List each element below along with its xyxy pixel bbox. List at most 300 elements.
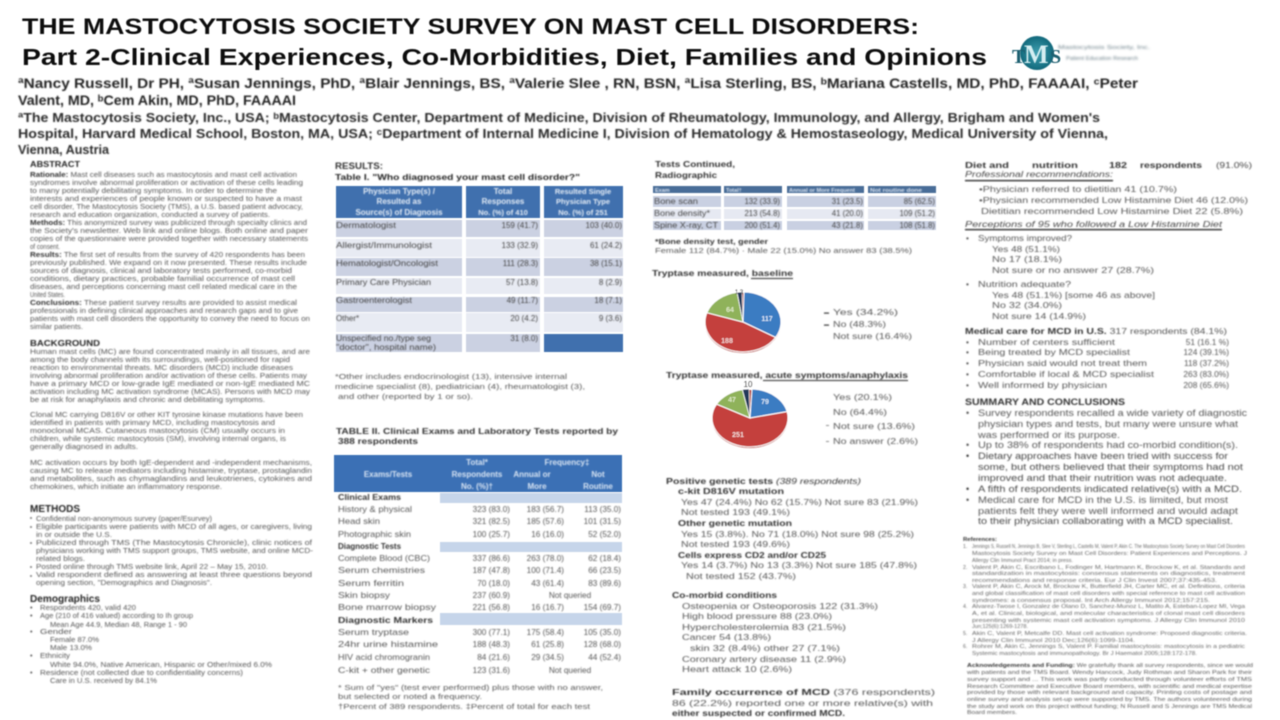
authors: Valent, MD, ᵇCem Akin, MD, PhD, FAAAAI xyxy=(18,93,296,108)
table II: Exams/Tests xyxy=(364,470,413,479)
table II: 321 (82.5) xyxy=(473,517,510,526)
text: family occurrence of MCD xyxy=(672,687,935,718)
list: genetic results: Not tested 193 (49.6%) xyxy=(681,539,790,549)
list: perceptions: Nutrition adequate? xyxy=(978,279,1071,289)
list: medical care: 124 (39.1%) xyxy=(1183,347,1229,357)
table II: Total* xyxy=(466,458,489,467)
list: methods bullets: Confidential non-anonymous survey (paper/Esurvey) xyxy=(36,514,212,523)
text: results: conditions, dietary practices, probable familial occurrence of mast cell xyxy=(30,274,295,283)
table I: Physician Type xyxy=(556,197,610,206)
legend: tryptase baseline: No (48.3%) xyxy=(833,320,886,329)
table: radiographic: Bone scan xyxy=(654,197,698,206)
list: conclusions: Dietary approaches have been tried with success for xyxy=(978,451,1228,461)
list: perceptions: No 17 (18.1%) xyxy=(992,254,1062,264)
panel: positive genetic tests xyxy=(666,476,918,581)
list: conclusions: physician types and tests, but many were unsure what xyxy=(978,419,1239,429)
list: co-morbid conditions xyxy=(682,601,878,674)
table I: 20 (4.2) xyxy=(510,314,538,323)
panel: table II clinical exams and tests xyxy=(334,426,622,711)
subheading: professional recommendations: Professional recommendations: xyxy=(965,169,1113,179)
icon: TMS society logo: T xyxy=(1012,46,1026,68)
pie chart: tryptase acute symptoms: 47 xyxy=(728,397,736,404)
text: background paragraph 3 xyxy=(30,458,312,491)
table: radiographic xyxy=(653,186,936,230)
table II: 16 (16.7) xyxy=(531,603,564,612)
affiliations: Hospital, Harvard Medical School, Boston, MA, USA; ᶜDepartment of Internal Medicine I, Division of Hematology & Hemostaseology, Medical University of Vienna, xyxy=(18,127,1108,141)
table II: Serum tryptase xyxy=(338,628,410,637)
authors xyxy=(18,76,1139,108)
table II: 263 (78.0) xyxy=(527,554,564,563)
text: acknowledgements and funding: Research Committee and Executive Board members, with scientific and medical expertise xyxy=(967,684,1252,690)
list: references: presenting with systemic mast cell activation symptoms. J Allergy Clin Immunol 2010 xyxy=(972,618,1245,624)
list: medical care: • xyxy=(966,358,969,368)
text: acknowledgements and funding xyxy=(966,663,1253,716)
table: radiographic: Exam xyxy=(655,188,670,194)
heading: references: References: xyxy=(963,537,997,543)
list: conclusions: • xyxy=(966,440,969,450)
table I: 9 (3.6) xyxy=(599,314,622,323)
list: genetic results: Cells express CD2 and/or CD25 xyxy=(678,550,826,560)
list: methods bullets: Posted online through TMS website link, April 22 – May 15, 2010. xyxy=(36,562,268,571)
table II: Diagnostic Tests xyxy=(338,542,401,551)
text: conclusions xyxy=(30,298,310,331)
text: background paragraph 1: have a primary MCD or low-grade IgE mediated or non-IgE mediated MC xyxy=(30,379,310,388)
heading: co-morbid conditions: Co-morbid conditions xyxy=(672,590,777,600)
text: acknowledgements and funding: online survey and analysis set-up were supported by TMS. The authors volunteered during xyxy=(967,697,1252,703)
list: references: 1. xyxy=(963,544,967,550)
list: references: and global classification of mast cell disorders with special reference to mast cell activation xyxy=(972,591,1245,597)
heading: methods: METHODS xyxy=(30,504,80,515)
text: results xyxy=(30,250,307,299)
list: co-morbid conditions: Hypercholesterolemia 83 (21.5%) xyxy=(682,622,846,632)
table I: 57 (13.8) xyxy=(506,278,538,287)
list: references: Valent P, Akin C, Escribano L, Fodinger M, Hartmann K, Brockow K, et al. Standards and xyxy=(972,565,1245,571)
table II: 100 (71.4) xyxy=(527,566,564,575)
table: radiographic: 43 (21.8) xyxy=(832,221,863,230)
table II xyxy=(334,455,622,675)
text: table II footnotes: †Percent of 389 respondents. ‡Percent of total for each test xyxy=(338,704,590,711)
icon: TMS society logo: Patient Education Research xyxy=(1066,56,1138,62)
list: references: standardization in mastocytosis: consensus statements on diagnostics, treatment xyxy=(972,571,1246,577)
table II: 24hr urine histamine xyxy=(338,640,439,649)
table II: Serum ferritin xyxy=(338,579,405,588)
text: conclusions: patients with mast cell disorders the opportunity to convey the need to focus on xyxy=(30,314,310,323)
table II: Not queried xyxy=(549,666,592,675)
pie chart: tryptase acute symptoms: 10 xyxy=(744,380,753,389)
list: references: Allergy Clin Immunol Pract 2014; in press. xyxy=(972,558,1073,564)
table II: Photographic skin xyxy=(338,530,411,539)
table I: 159 (41.7) xyxy=(502,221,538,230)
text: bone density footnote: Female 112 (84.7%) · Male 22 (15.0%) No answer 83 (38.5%) xyxy=(655,246,912,255)
table I: Source(s) of Diagnosis xyxy=(355,208,443,217)
authors: ªNancy Russell, Dr PH, ªSusan Jennings, PhD, ªBlair Jennings, BS, ªValerie Slee , RN, BSN, ªLisa Sterling, BS, ᵇMariana Castells, MD, PhD, FAAAAI, ᶜPeter xyxy=(18,76,1139,91)
text: background paragraph 1: Human mast cells (MC) are found concentrated mainly in all tissues, and are xyxy=(30,347,310,356)
pie chart: tryptase acute symptoms xyxy=(712,380,788,448)
table I: Hematologist/Oncologist xyxy=(336,259,439,268)
table: radiographic: 31 (23.5) xyxy=(832,197,863,206)
text: methods: copies of the questionnaire were provided together with necessary statements xyxy=(30,234,308,243)
list: genetic results: Other genetic mutation xyxy=(678,518,792,528)
list: methods bullets: in or outside the U.S. xyxy=(36,530,112,539)
legend: tryptase baseline: Yes (34.2%) xyxy=(833,308,898,317)
list: demographics: Residence (not collected due to confidentiality concerns) xyxy=(40,668,243,677)
text: conclusions: similar patients. xyxy=(30,322,83,331)
list: conclusions xyxy=(966,408,1248,526)
list: genetic results: Not tested 152 (43.7%) xyxy=(686,571,796,581)
table I: 31 (8.0) xyxy=(510,334,538,343)
list: conclusions: Up to 38% of respondents had co-morbid condition(s). xyxy=(978,440,1238,450)
icon: TMS society logo xyxy=(1012,36,1150,70)
panel: summary and conclusions xyxy=(965,397,1248,526)
list: demographics: Mean Age 44.9, Median 48, Range 1 - 90 xyxy=(50,620,187,629)
list: demographics: • xyxy=(30,668,33,677)
table II: 187 (47.8) xyxy=(473,566,510,575)
list: perceptions: Symptoms improved? xyxy=(978,233,1072,243)
text: background paragraph 3: MC activation occurs by both IgE-dependent and -independent mechanisms, xyxy=(30,458,312,467)
legend: tryptase baseline: Not sure (16.4%) xyxy=(833,332,912,341)
list: references: 2. xyxy=(963,565,967,571)
list: medical care: • xyxy=(966,369,969,379)
text: rationale: cell disorder, The Mastocytosis Society (TMS), a U.S. based patient advocacy, xyxy=(30,202,303,211)
table I: Total xyxy=(494,187,512,196)
table I: Gastroenterologist xyxy=(336,296,413,305)
pie chart: tryptase at baseline: 64 xyxy=(726,307,734,314)
panel: tryptase acute pie xyxy=(666,370,918,448)
heading: medical care: Medical care for MCD in U.S. 317 respondents (84.1%) xyxy=(965,326,1227,336)
text: background paragraph 1: involving abnormal proliferation and/or activation of these cells. Patients may xyxy=(30,371,307,380)
table: radiographic: 41 (20.0) xyxy=(832,209,863,218)
table II: 123 (31.6) xyxy=(473,666,510,675)
list: methods bullets: Eligible participants were patients with MCD of all ages, or caregivers, living xyxy=(36,522,312,531)
table II: 52 (52.0) xyxy=(588,530,621,539)
list: methods bullets: opening section, "Demographics and Diagnosis". xyxy=(36,578,212,587)
table II: No. (%)† xyxy=(461,482,493,491)
table I: Primary Care Physician xyxy=(336,278,431,287)
text: table I footnote xyxy=(335,372,585,401)
list: references: Akin C, Valent P, Metcalfe DD. Mast cell activation syndrome: Proposed diagnostic criteria. xyxy=(972,631,1247,637)
table: radiographic: 85 (62.5) xyxy=(904,197,935,206)
panel: methods xyxy=(30,504,314,587)
panel: co-morbid conditions xyxy=(672,590,878,674)
list: perceptions: Yes 48 (51.1%) xyxy=(992,244,1060,254)
list: conclusions: Medical care for MCD in the U.S. is limited, but most xyxy=(978,495,1229,505)
table I: "doctor", hospital name) xyxy=(336,343,436,352)
table II: Not xyxy=(591,470,605,479)
list: genetic results: Yes 15 (3.8%). No 71 (18.0%) Not sure 98 (25.2%) xyxy=(681,529,914,539)
list: perceptions xyxy=(966,233,1155,321)
heading: tests continued: Tests Continued, xyxy=(655,159,735,169)
list: references: J Allergy Clin Immunol 2010 Dec;126(6):1099-1104. xyxy=(972,638,1135,644)
list: demographics xyxy=(30,603,273,685)
list: co-morbid conditions: Heart attack 10 (2.6%) xyxy=(682,664,792,674)
pie chart: tryptase acute symptoms: 251 xyxy=(732,432,744,439)
text: conclusions: Conclusions: These patient survey results are provided to assist medical xyxy=(30,298,297,307)
table II: 175 (58.4) xyxy=(527,628,564,637)
table II: Complete Blood (CBC) xyxy=(338,554,430,563)
list: methods bullets: physicians working with TMS support groups, TMS website, and online MCD- xyxy=(36,546,314,555)
text: family occurrence of MCD: 86 (22.2%) reported one or more relative(s) with xyxy=(672,698,933,708)
table I: Allergist/Immunologist xyxy=(336,241,433,250)
text: results: United States. xyxy=(30,290,65,299)
table: radiographic: 132 (33.9) xyxy=(744,197,780,206)
text: methods: of consent. xyxy=(30,242,60,251)
text: bone density footnote: *Bone density test, gender xyxy=(655,237,768,246)
table II: HIV acid chromogranin xyxy=(338,653,430,662)
legend: tryptase acute: Not sure (13.6%) xyxy=(833,422,915,431)
table II: 100 (25.7) xyxy=(473,530,510,539)
text: family occurrence of MCD: Family occurrence of MCD (376 respondents) xyxy=(672,687,935,697)
list: demographics: Respondents 420, valid 420 xyxy=(40,603,136,612)
text: rationale: Rationale: Mast cell diseases such as mastocytosis and mast cell activation xyxy=(30,170,297,179)
affiliations: Vienna, Austria xyxy=(18,143,110,157)
list: medical care: Number of centers sufficient xyxy=(978,337,1116,347)
panel: tryptase baseline pie xyxy=(652,268,912,353)
list: conclusions: • xyxy=(966,451,969,461)
text: methods xyxy=(30,218,309,251)
list: genetic results: Yes 47 (24.4%) No 62 (15.7%) Not sure 83 (21.9%) xyxy=(681,497,918,507)
list: genetic results: Not tested 193 (49.1%) xyxy=(681,507,790,517)
subheading: perceptions: Perceptions of 95 who followed a Low Histamine Diet xyxy=(965,219,1223,229)
heading: tests continued: Radiographic xyxy=(655,170,717,180)
list: medical care: • xyxy=(966,337,969,347)
heading: demographics: Demographics xyxy=(30,594,100,605)
heading: diet and nutrition: nutrition xyxy=(1032,160,1078,170)
list: medical care: Being treated by MCD specialist xyxy=(978,347,1131,357)
list: co-morbid conditions: High blood pressure 88 (23.0%) xyxy=(682,611,832,621)
pie chart: tryptase at baseline xyxy=(705,290,781,353)
list: references: Rohrer M, Akin C, Jennings S, Valent P. Familial mastocytosis: mastocytosis in a pediatric xyxy=(972,644,1246,650)
table II: 29 (34.5) xyxy=(531,653,564,662)
table II: Skin biopsy xyxy=(338,591,391,600)
heading: table I title: Table I. "Who diagnosed your mast cell disorder?" xyxy=(335,172,580,182)
heading: abstract: ABSTRACT xyxy=(30,160,80,169)
table II: Serum chemistries xyxy=(338,566,425,575)
affiliations: ªThe Mastocytosis Society, Inc., USA; ᵇMastocytosis Center, Department of Medicine, Division of Rheumatology, Immunology, and Allergy, Brigham and Women's xyxy=(18,111,1100,125)
text: rationale: interests and experiences of people known or suspected to have a mast xyxy=(30,194,302,203)
text: rationale: to many potentially debilitating symptoms. In order to determine the xyxy=(30,186,277,195)
text: table II footnotes xyxy=(338,685,603,711)
table: radiographic: 200 (51.4) xyxy=(744,221,780,230)
list: demographics: White 94.0%, Native American, Hispanic or Other/mixed 6.0% xyxy=(50,660,273,669)
text: background paragraph 2 xyxy=(30,410,303,451)
text: background paragraph 3: chemokines, which initiate an inflammatory response. xyxy=(30,482,222,491)
legend: tryptase acute xyxy=(826,393,918,446)
text: table II footnotes: but selected or noted a frequency. xyxy=(338,694,482,701)
list: medical care: 51 (16.1 %) xyxy=(1186,337,1229,347)
table II: Diagnostic Markers xyxy=(338,616,434,625)
list: demographics: • xyxy=(30,651,33,660)
list: references: 5. xyxy=(963,631,967,637)
text: rationale xyxy=(30,170,303,219)
list: recommendations: •Physician recommended Low Histamine Diet 46 (12.0%) xyxy=(979,195,1248,205)
list: references: 4. xyxy=(963,604,967,610)
list: medical care: 263 (83.0%) xyxy=(1183,369,1229,379)
heading: diet and nutrition: 182 xyxy=(1109,160,1127,170)
table II: 62 (18.4) xyxy=(588,554,621,563)
text: methods: Methods: This anonymized survey was publicized through specialty clinics and xyxy=(30,218,307,227)
table II: Respondents xyxy=(452,470,503,479)
table II: More xyxy=(527,482,547,491)
list: methods bullets: related blogs. xyxy=(36,554,85,563)
text: background paragraph 1: activation including MC activation syndrome (MCAS). Persons with MCD may xyxy=(30,387,310,396)
title: THE MASTOCYTOSIS SOCIETY SURVEY ON MAST CELL DISORDERS: xyxy=(22,14,919,39)
table: radiographic: Bone density* xyxy=(654,209,710,218)
table I: Resulted Single xyxy=(555,187,611,196)
list: medical care: • xyxy=(966,347,969,357)
table I: No. (%) of 251 xyxy=(558,208,608,217)
heading: diet and nutrition xyxy=(965,160,1252,170)
panel: demographics xyxy=(30,594,273,685)
table I xyxy=(336,186,623,352)
list: references: Alvarez-Twose I, Gonzalez de Olano D, Sanchez-Munoz L, Matito A, Esteban-Lopez MI, Vega xyxy=(972,604,1245,610)
affiliations xyxy=(18,111,1108,157)
table II: Bone marrow biopsy xyxy=(338,603,437,612)
table: radiographic: 109 (51.2) xyxy=(899,209,935,218)
list: methods bullets: Publicized through TMS (The Mastocytosis Chronicle), clinic notices of xyxy=(36,538,312,547)
table II: 43 (61.4) xyxy=(531,579,564,588)
text: table I footnote: and other (reported by 1 or so). xyxy=(338,392,473,401)
list: genetic results: Yes 14 (3.7%) No 13 (3.3%) Not sure 185 (47.8%) xyxy=(681,560,917,570)
table II: 183 (56.7) xyxy=(527,505,564,514)
text: rationale: syndromes involve abnormal proliferation or activation of these cells leading xyxy=(30,178,303,187)
table II: 83 (89.6) xyxy=(588,579,621,588)
table II: 221 (56.8) xyxy=(473,603,510,612)
panel: background xyxy=(30,339,312,491)
list: demographics: • xyxy=(30,611,33,620)
heading: tests continued xyxy=(655,159,735,180)
table II: Routine xyxy=(583,482,613,491)
table I: 18 (7.1) xyxy=(594,296,622,305)
table II: 16 (16.0) xyxy=(531,530,564,539)
table II: C-kit + other genetic xyxy=(338,666,430,675)
table I: 8 (2.9) xyxy=(599,278,622,287)
list: medical care xyxy=(966,337,1229,390)
legend: tryptase baseline xyxy=(824,308,912,341)
panel: radiographic tests xyxy=(653,159,936,255)
text: acknowledgements and funding: Acknowledgements and Funding: We gratefully thank all survey respondents, since we would xyxy=(967,663,1253,669)
text: acknowledgements and funding: Board members. xyxy=(967,710,1017,716)
table: radiographic: Total† xyxy=(726,188,742,194)
text: family occurrence of MCD: either suspected or confirmed MCD. xyxy=(672,708,845,718)
list: references: Jun;125(6):1269-1278. xyxy=(972,624,1028,630)
list: medical care: 118 (37.2%) xyxy=(1184,358,1229,368)
table I: No. (%) of 410 xyxy=(478,208,528,217)
list: demographics: • xyxy=(30,627,33,636)
table II: 154 (69.7) xyxy=(584,603,621,612)
pie chart: tryptase at baseline: 1 3 xyxy=(735,290,744,296)
icon: TMS society logo: Mastocytosis Society, Inc. xyxy=(1058,45,1150,51)
list: conclusions: Survey respondents recalled a wide variety of diagnostic xyxy=(978,408,1248,418)
list: references: Systemic mastocytosis and immunopathology. Br J Haematol 2005;128:172-178. xyxy=(972,651,1197,657)
list: conclusions: A fifth of respondents indicated relative(s) with a MCD. xyxy=(978,484,1242,494)
text: table II footnotes: * Sum of "yes" (test ever performed) plus those with no answer, xyxy=(338,685,603,692)
list: conclusions: • xyxy=(966,484,969,494)
text: rationale: research and education organization, conducted a survey of patients. xyxy=(30,210,270,219)
text: acknowledgements and funding: the study and work on this project without funding; N Russell and S Jennings are TMS Medical xyxy=(967,704,1252,710)
list: perceptions: • xyxy=(966,233,969,243)
heading: genetic tests: Positive genetic tests (389 respondents) xyxy=(666,476,861,486)
list: conclusions: • xyxy=(966,495,969,505)
list: recommendations xyxy=(979,184,1248,216)
table: radiographic: 213 (54.8) xyxy=(744,209,780,218)
list: conclusions: to their physician collaborating with a MCD specialist. xyxy=(978,516,1233,526)
text: background paragraph 3: and metabolites, such as chymaglandins and leukotrienes, cytokines and xyxy=(30,474,312,483)
list: references: 6. xyxy=(963,644,967,650)
table II: Not queried xyxy=(549,591,592,600)
legend: tryptase acute: Yes (20.1%) xyxy=(833,393,892,402)
list: medical care: • xyxy=(966,380,969,390)
icon: TMS society logo: S xyxy=(1050,46,1061,68)
table: radiographic: Not routine done xyxy=(870,188,922,194)
table I: Resulted as xyxy=(377,197,422,206)
table II: 84 (21.6) xyxy=(477,653,510,662)
legend: tryptase acute: No (64.4%) xyxy=(833,408,887,417)
list: references xyxy=(963,544,1248,657)
table I: 111 (28.3) xyxy=(503,259,538,268)
table: radiographic: 108 (51.8) xyxy=(899,221,935,230)
heading: tryptase baseline: Tryptase measured, baseline xyxy=(652,268,793,278)
pie chart: tryptase acute symptoms: 79 xyxy=(761,399,769,406)
table II: 113 (35.0) xyxy=(584,505,621,514)
text: methods: the Society's newsletter. Web link and online blogs. Both online and paper xyxy=(30,226,309,235)
text: table I footnote: medicine specialist (8), pediatrician (4), rheumatologist (3), xyxy=(335,382,585,391)
list: demographics: Ethnicity xyxy=(40,651,70,660)
table: radiographic: Spine X-ray, CT xyxy=(654,221,718,230)
list: medical care: Physician said would not treat them xyxy=(978,358,1147,368)
list: perceptions: Yes 48 (51.1%) [some 46 as above] xyxy=(992,290,1155,300)
text: results: diseases, and perceptions concerning mast cell related medical care in the xyxy=(30,282,297,291)
table II: History & physical xyxy=(338,505,412,514)
table II: 66 (23.5) xyxy=(588,566,621,575)
list: recommendations: Dietitian recommended Low Histamine Diet 22 (5.8%) xyxy=(981,206,1243,216)
list: perceptions: No 32 (34.0%) xyxy=(992,300,1062,310)
table I: Other* xyxy=(336,314,359,323)
list: medical care: 208 (65.6%) xyxy=(1183,380,1229,390)
table I: Responses xyxy=(482,197,525,206)
pie chart: tryptase at baseline: 188 xyxy=(721,338,733,345)
text: background paragraph 1: be at risk for anaphylaxis and chronic and debilitating symptoms. xyxy=(30,395,265,404)
list: methods bullets: Valid respondent defined as answering at least three questions beyond xyxy=(36,570,312,579)
list: conclusions: some, but others believed that their symptoms had not xyxy=(978,462,1244,472)
heading: tryptase acute: Tryptase measured, acute symptoms/anaphylaxis xyxy=(666,370,908,380)
text: background paragraph 2: children, while systemic mastocytosis (SM), involving internal organs, is xyxy=(30,434,286,443)
table II: 128 (68.0) xyxy=(584,640,621,649)
list: genetic results: c-kit D816V mutation xyxy=(678,486,784,496)
table II: 44 (52.4) xyxy=(588,653,621,662)
list: co-morbid conditions: Cancer 54 (13.8%) xyxy=(682,632,771,642)
text: results: Results: The first set of results from the survey of 420 respondents has been xyxy=(30,250,305,259)
list: references: 3. xyxy=(963,584,967,590)
list: genetic results xyxy=(678,486,918,581)
panel: medical care for MCD xyxy=(965,326,1229,390)
table: radiographic: Annual or More Frequent xyxy=(789,188,855,194)
table II: 300 (77.1) xyxy=(473,628,510,637)
list: demographics: Female 87.0% xyxy=(50,635,100,644)
heading: table II title: TABLE II. Clinical Exams and Laboratory Tests reported by xyxy=(336,426,618,436)
table II: 70 (18.0) xyxy=(477,579,510,588)
table II: Clinical Exams xyxy=(338,493,401,502)
panel: references xyxy=(963,537,1248,657)
table I: 61 (24.2) xyxy=(590,241,622,250)
heading: diet and nutrition: (91.0%) xyxy=(1216,160,1252,170)
list: demographics: Male 13.0% xyxy=(50,643,93,652)
panel: diet and nutrition xyxy=(965,160,1252,321)
list: conclusions: • xyxy=(966,408,969,418)
text: acknowledgements and funding: with patients and the TMS Board. Wendy Hancock, Judy Rothman and Sharon Park for their xyxy=(966,670,1252,676)
table II: 337 (86.6) xyxy=(473,554,510,563)
list: demographics: Gender xyxy=(40,627,73,636)
list: references: syndromes: a consensus proposal. Int Arch Allergy Immunol 2012;157:215. xyxy=(972,598,1210,604)
